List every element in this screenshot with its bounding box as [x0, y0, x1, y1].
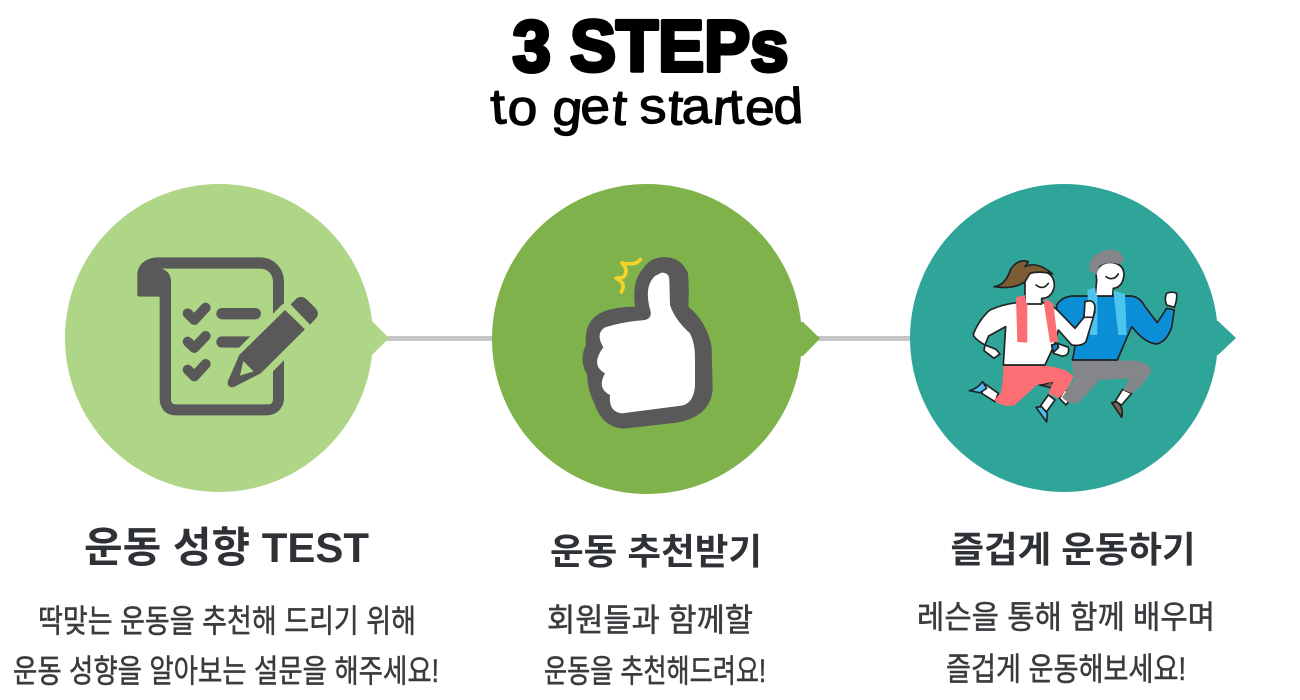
step 2 circle — [492, 184, 820, 494]
text block: step 1 — [13, 603, 439, 689]
pencil — [222, 303, 312, 389]
icon: two runners — [969, 249, 1177, 422]
man — [1039, 249, 1177, 417]
text block: step 3: 즐겁게 운동해보세요! — [946, 651, 1186, 687]
step 3 circle — [910, 184, 1236, 492]
text block: step 2: 운동을 추천해드려요! — [544, 653, 766, 689]
title: 3 STEPs — [512, 7, 788, 87]
heading: step 2: 운동 추천받기 — [550, 531, 762, 572]
text block: step 2: 회원들과 함께할 — [547, 602, 753, 638]
text block: step 3: 레슨을 통해 함께 배우며 — [917, 599, 1215, 635]
text block: step 1: 운동 성향을 알아보는 설문을 해주세요! — [13, 653, 439, 689]
checks — [188, 308, 206, 376]
subtitle: to get started — [489, 77, 805, 138]
heading: step 1: 운동 성향 TEST — [84, 524, 369, 571]
text block: step 2 — [544, 602, 766, 689]
text block: step 3 — [917, 599, 1215, 687]
woman — [969, 261, 1095, 422]
icon: thumbs up — [582, 257, 713, 429]
heading: step 3: 즐겁게 운동하기 — [950, 529, 1196, 570]
step 1 circle — [65, 184, 389, 492]
icon: checklist and pencil — [137, 257, 318, 415]
text block: step 1: 딱맞는 운동을 추천해 드리기 위해 — [38, 603, 416, 639]
